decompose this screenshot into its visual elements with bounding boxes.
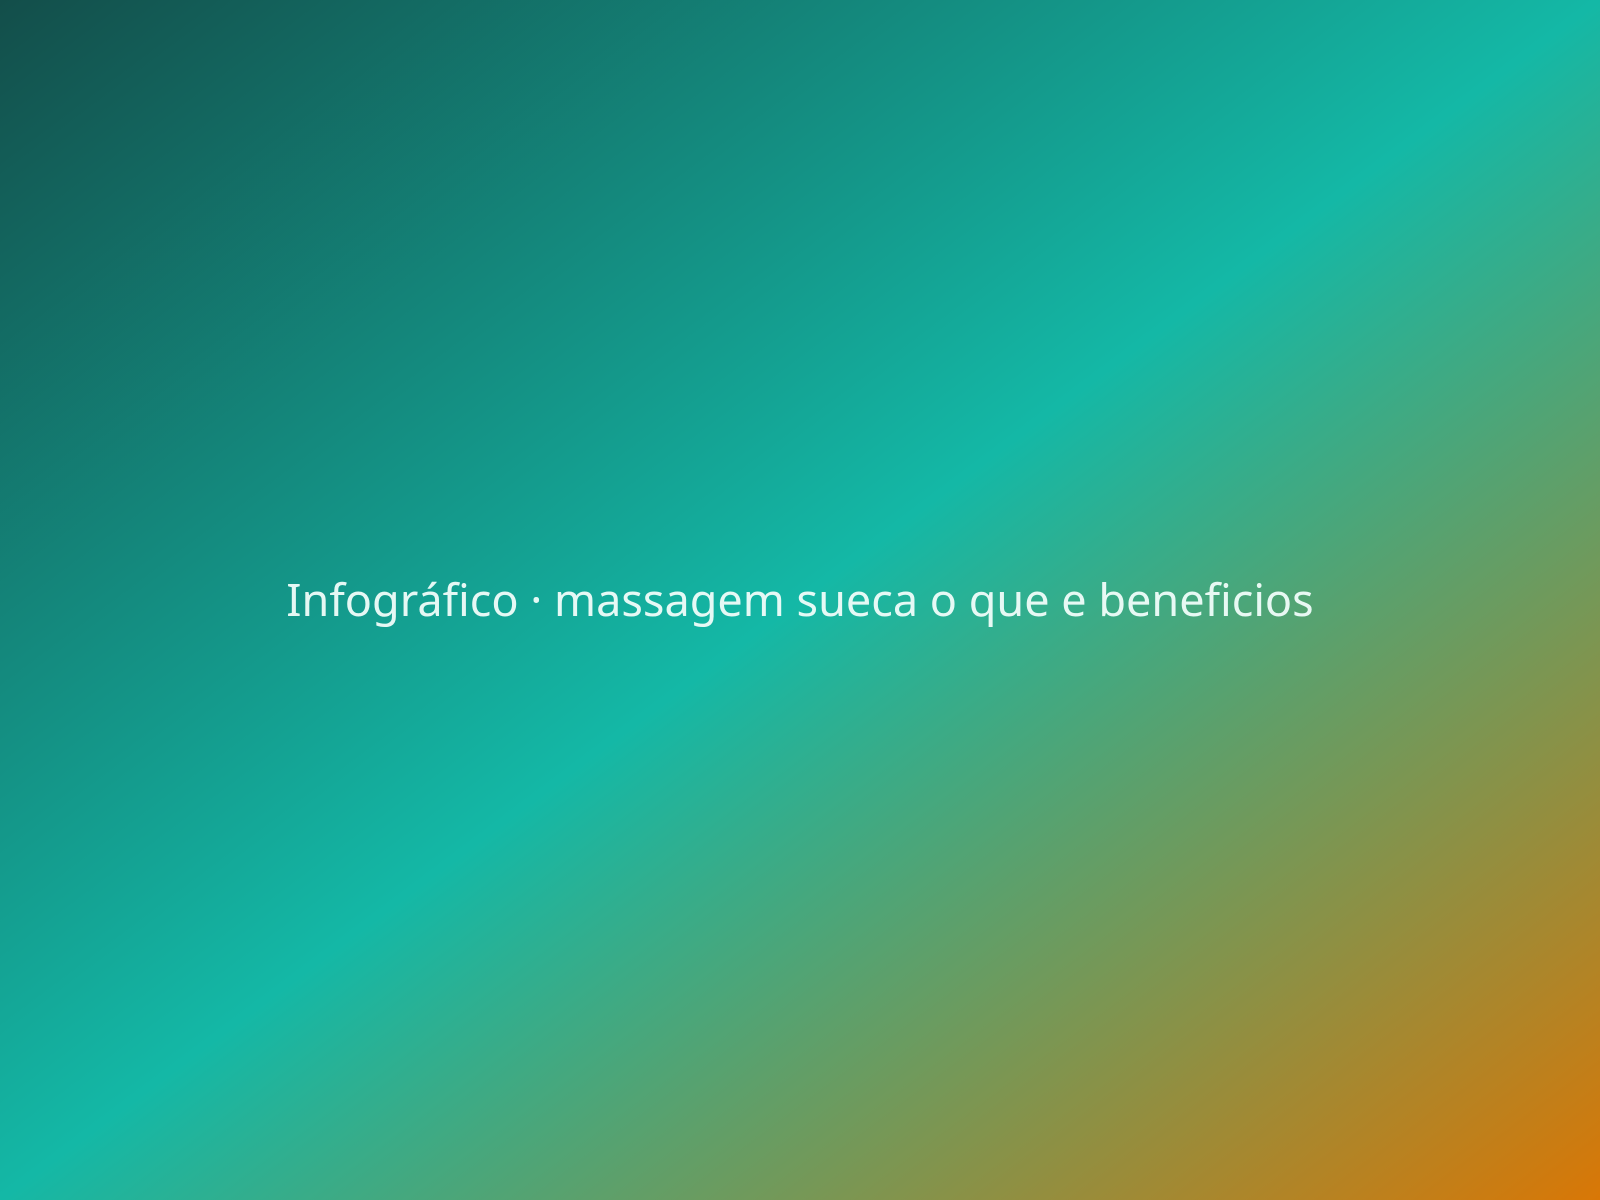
title: Infográfico · massagem sueca o que e beneficios — [286, 569, 1314, 630]
